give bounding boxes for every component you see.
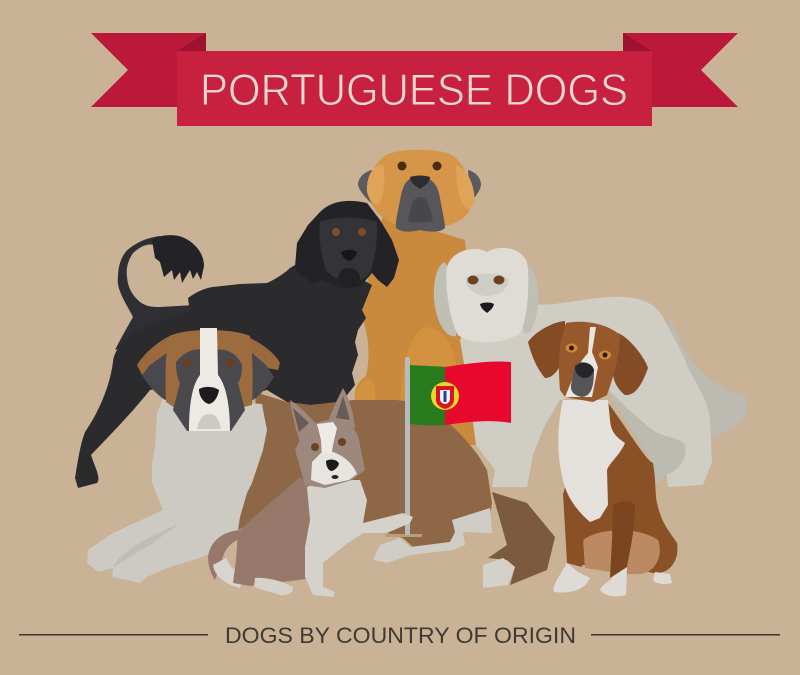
water dog curly head and ears — [295, 201, 399, 288]
ribbon right fold — [623, 33, 652, 51]
lying dog tail tip — [483, 558, 515, 588]
hound paw left — [554, 563, 590, 592]
hound near front leg — [563, 493, 584, 567]
footer caption: DOGS BY COUNTRY OF ORIGIN — [225, 623, 576, 648]
ribbon left tail — [91, 33, 206, 107]
sheepdog right ear — [518, 264, 538, 333]
terrier nose — [326, 460, 339, 471]
footer right rule — [591, 634, 780, 636]
mastiff right fold ear — [456, 165, 475, 209]
hound paw center — [600, 567, 627, 596]
hound body — [563, 403, 677, 573]
terrier chest and front legs — [305, 480, 413, 597]
hound haunch — [583, 530, 660, 574]
St Bernard right eye — [226, 359, 234, 367]
hound white blaze — [565, 327, 598, 397]
St Bernard white blaze and muzzle — [189, 328, 230, 431]
lying dog brown body — [238, 392, 492, 547]
St Bernard head brown — [165, 330, 253, 408]
water dog right eye — [358, 228, 366, 236]
terrier muzzle — [311, 452, 357, 485]
ribbon right tail — [623, 33, 738, 107]
dog: Saint Bernard-type (lying, brown and white) — [87, 328, 555, 588]
St Bernard nose — [199, 387, 219, 404]
sheepdog body — [460, 297, 712, 487]
lying dog hind leg — [373, 508, 492, 563]
sheepdog far legs — [660, 315, 747, 445]
sheepdog head — [446, 248, 528, 342]
dog: mastiff (tan, standing behind) — [355, 150, 481, 445]
title: PORTUGUESE DOGS — [200, 66, 628, 115]
lying dog tail — [488, 492, 555, 585]
sheepdog left eye — [468, 276, 478, 284]
hound right ear — [613, 333, 648, 395]
dog: small terrier (sitting, taupe and white) — [208, 388, 413, 597]
mastiff body — [355, 215, 477, 445]
hound white chest — [558, 400, 625, 522]
flag red field — [445, 361, 511, 425]
terrier tail — [208, 530, 245, 580]
mastiff left ear — [358, 170, 372, 204]
mastiff right eye — [432, 162, 442, 170]
sheepdog right eye — [494, 276, 504, 284]
terrier tail tip — [213, 558, 245, 588]
hound nose — [575, 363, 594, 378]
mastiff left fold ear — [367, 165, 384, 205]
mastiff mouth shadow — [408, 197, 433, 222]
hound left eye — [566, 344, 578, 352]
emblem armillary sphere — [431, 382, 459, 410]
water dog face — [319, 218, 377, 282]
St Bernard dark mask — [173, 349, 245, 431]
sheepdog face shade — [466, 274, 508, 296]
sheepdog left ear — [434, 262, 460, 336]
hound muzzle — [571, 362, 594, 397]
mastiff head — [369, 150, 472, 228]
water dog tail tassel — [152, 235, 204, 283]
mastiff left eye — [398, 162, 406, 170]
mastiff right ear — [468, 170, 481, 203]
emblem inner shield — [440, 390, 450, 404]
dog: Portuguese water dog (black, curly) — [75, 201, 399, 488]
footer left rule — [19, 634, 208, 636]
terrier mouth — [332, 475, 338, 479]
terrier right eye — [338, 438, 346, 446]
flag of Portugal — [385, 357, 511, 537]
water dog nose — [341, 250, 357, 261]
lying dog chest — [87, 398, 267, 583]
water dog tail — [115, 236, 195, 350]
hound right eye — [599, 350, 611, 360]
St Bernard mouth shade — [197, 414, 221, 429]
flag pole base — [385, 534, 422, 537]
terrier right ear — [328, 388, 355, 428]
title ribbon — [91, 33, 738, 126]
St Bernard left eye — [183, 359, 191, 367]
emblem quinas — [444, 391, 446, 402]
terrier blaze — [317, 422, 337, 458]
ribbon main band — [177, 51, 652, 126]
emblem shield — [436, 386, 454, 409]
dog: sheepdog (pale grey, shaggy) — [434, 248, 747, 487]
hound second front leg — [610, 501, 635, 578]
mastiff front leg shading — [355, 327, 456, 420]
terrier left inner ear — [293, 408, 309, 432]
mastiff nose — [410, 176, 430, 189]
St Bernard right ear dark — [247, 353, 274, 400]
flag emblem — [431, 382, 459, 410]
water dog mouth — [338, 268, 360, 288]
terrier body — [233, 477, 315, 586]
terrier left eye — [311, 443, 319, 451]
hound paw right — [653, 572, 672, 584]
terrier head — [295, 420, 365, 488]
dog: boxer-type hound (sitting, brown and white) — [528, 321, 677, 596]
water dog left eye — [332, 228, 340, 236]
ribbon left fold — [177, 33, 206, 51]
sheepdog inner hind leg — [606, 388, 686, 484]
mastiff muzzle — [396, 177, 445, 232]
terrier rear paw — [254, 578, 293, 595]
hound left ear — [528, 321, 565, 378]
water dog body — [75, 262, 372, 488]
St Bernard left ear dark — [142, 353, 172, 400]
sheepdog nose — [480, 302, 494, 313]
lying dog leg separation — [113, 523, 180, 568]
flag pole — [405, 357, 410, 535]
terrier right inner ear — [336, 396, 350, 420]
hound head — [559, 322, 620, 402]
St Bernard left ear brown — [137, 335, 172, 375]
terrier left ear — [290, 400, 318, 442]
flag green field — [410, 365, 446, 425]
St Bernard right ear brown — [247, 337, 280, 370]
